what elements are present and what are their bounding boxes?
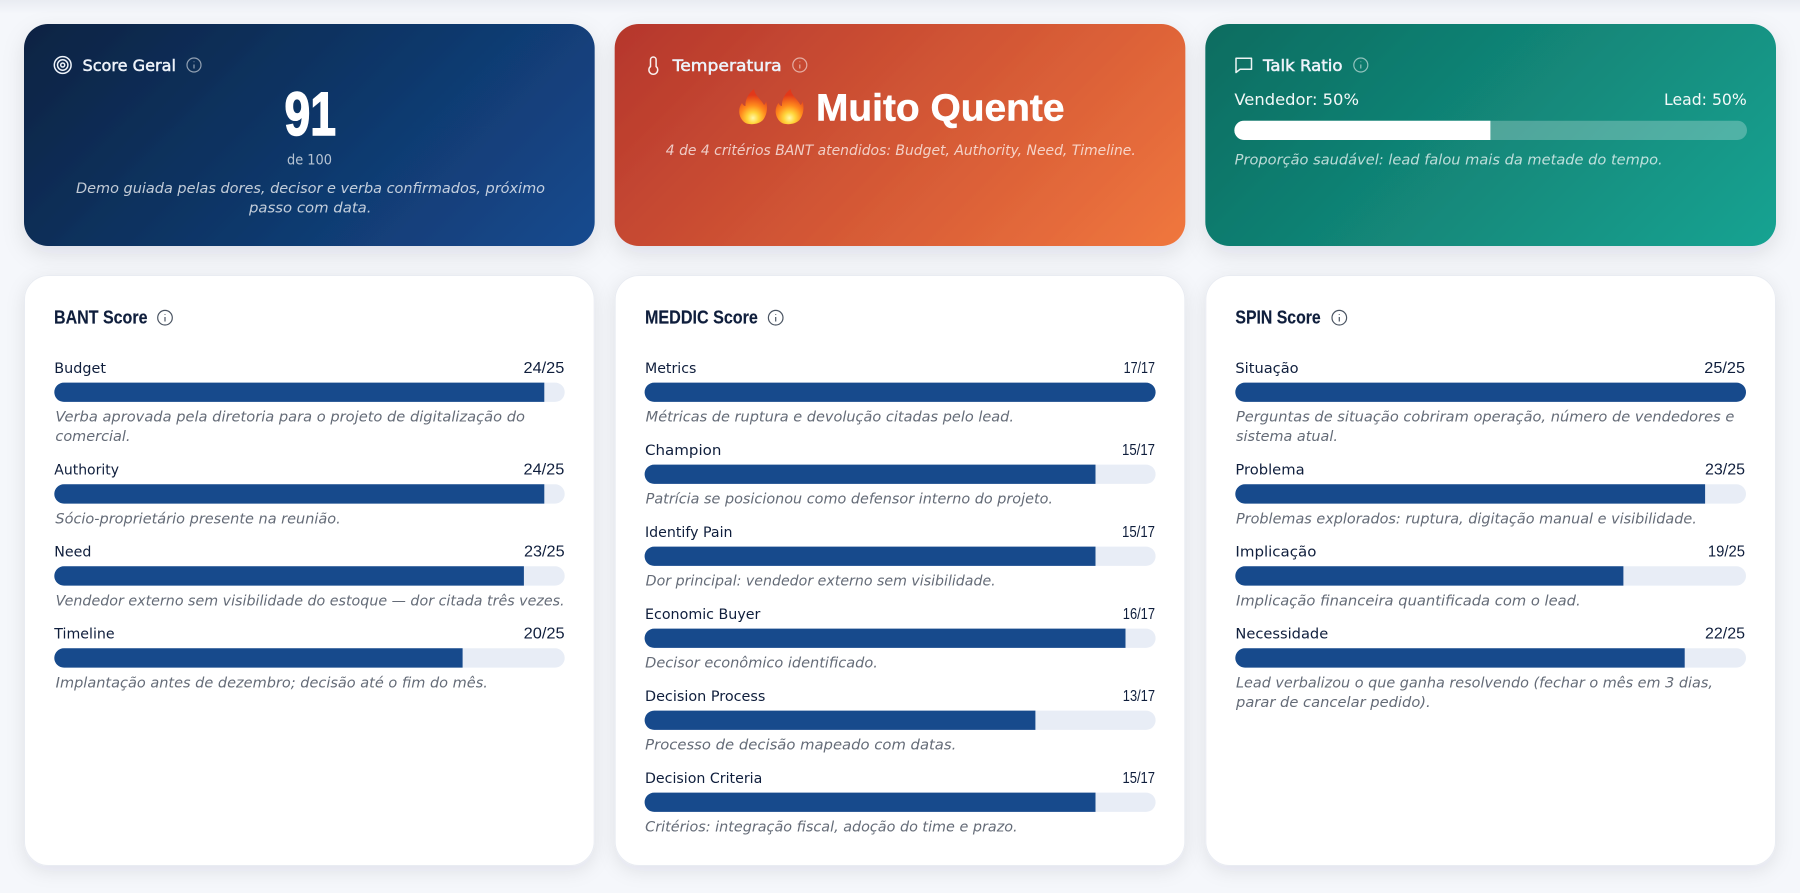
lead share: Lead: 50% xyxy=(1664,90,1747,109)
row: necessidade: Lead verbalizou o que ganha resolvendo (fechar o mês em 3 dias, xyxy=(1236,675,1713,691)
row: authority: Authority xyxy=(54,463,119,479)
panel: temperatura xyxy=(615,24,1185,246)
talk ratio bar xyxy=(1234,121,1747,140)
icon: chat bubble xyxy=(1236,58,1252,72)
score description xyxy=(76,181,545,216)
row: budget xyxy=(54,360,565,445)
row: budget: Verba aprovada pela diretoria para o projeto de digitalização do xyxy=(55,410,525,426)
row: need: Vendedor externo sem visibilidade do estoque — dor citada três vezes. xyxy=(56,593,565,609)
seller share: Vendedor: 50% xyxy=(1234,90,1359,109)
row: authority: Sócio-proprietário presente na reunião. xyxy=(55,511,341,527)
row: implicação: 19/25 xyxy=(1708,544,1745,561)
row: implicação: Implicação xyxy=(1235,545,1317,561)
row: necessidade: 22/25 xyxy=(1705,626,1745,643)
row: identify pain: Dor principal: vendedor externo sem visibilidade. xyxy=(646,574,996,590)
row: champion: Patrícia se posicionou como defensor interno do projeto. xyxy=(646,492,1053,508)
row: authority xyxy=(54,462,565,527)
panel: talk ratio xyxy=(1205,24,1776,246)
row: economic buyer: Decisor econômico identificado. xyxy=(645,656,878,672)
temperature value: Muito Quente xyxy=(816,88,1064,130)
row: implicação: Implicação financeira quantificada com o lead. xyxy=(1236,593,1581,609)
icon: target xyxy=(54,57,71,73)
panel: SPIN score xyxy=(1206,276,1776,866)
row: champion: Champion xyxy=(645,443,721,459)
row: budget: Budget xyxy=(54,361,106,377)
row: situação: 25/25 xyxy=(1704,360,1745,377)
icon: info xyxy=(1332,310,1347,325)
row: decision process xyxy=(645,688,1156,754)
icon: info xyxy=(768,310,783,325)
temperature description: 4 de 4 critérios BANT atendidos: Budget, Authority, Need, Timeline. xyxy=(666,143,1136,159)
row: metrics xyxy=(645,360,1156,426)
row: necessidade: Necessidade xyxy=(1235,627,1328,643)
row: need: Need xyxy=(54,545,91,561)
row: problema: 23/25 xyxy=(1705,462,1745,479)
heading: SPIN score: SPIN Score xyxy=(1235,308,1321,328)
row: necessidade: parar de cancelar pedido). xyxy=(1235,695,1431,711)
score scale: de 100 xyxy=(287,152,332,168)
row: timeline: 20/25 xyxy=(524,626,565,643)
row: identify pain: Identify Pain xyxy=(645,525,732,541)
row: decision criteria: Critérios: integração fiscal, adoção do time e prazo. xyxy=(645,820,1018,836)
row: metrics: Métricas de ruptura e devolução citadas pelo lead. xyxy=(646,410,1014,426)
icon: info xyxy=(793,58,807,72)
panel: BANT score xyxy=(24,276,594,866)
icon: info xyxy=(158,310,172,325)
icon: flame xyxy=(776,89,804,124)
talk ratio description: Proporção saudável: lead falou mais da metade do tempo. xyxy=(1235,152,1663,168)
heading: BANT score: BANT Score xyxy=(54,308,148,328)
row: need xyxy=(54,544,565,609)
row: decision criteria xyxy=(645,770,1156,836)
row: situação xyxy=(1235,360,1746,445)
row: economic buyer xyxy=(645,606,1156,672)
row: problema: Problemas explorados: ruptura, digitação manual e visibilidade. xyxy=(1236,511,1697,527)
heading: temperatura: Temperatura xyxy=(672,56,782,75)
row: authority: 24/25 xyxy=(524,462,564,479)
row: identify pain xyxy=(645,524,1156,590)
row: budget: comercial. xyxy=(55,429,130,445)
icon: info xyxy=(1354,58,1368,72)
row: decision criteria: 15/17 xyxy=(1122,770,1155,787)
row: decision process: 13/17 xyxy=(1123,688,1155,705)
row: problema xyxy=(1235,462,1746,527)
row: budget: 24/25 xyxy=(524,360,564,377)
panel: MEDDIC score xyxy=(615,276,1185,866)
heading: MEDDIC score: MEDDIC Score xyxy=(645,308,758,328)
score description: passo com data. xyxy=(248,200,372,216)
row: necessidade xyxy=(1235,626,1746,711)
row: timeline xyxy=(53,626,565,691)
row: metrics: 17/17 xyxy=(1124,360,1155,377)
panel: score geral xyxy=(24,24,595,246)
row: economic buyer: Economic Buyer xyxy=(645,607,760,623)
row: situação: Perguntas de situação cobriram operação, número de vendedores e xyxy=(1236,410,1734,426)
row: problema: Problema xyxy=(1235,463,1305,479)
row: decision process: Decision Process xyxy=(645,689,765,705)
row: champion: 15/17 xyxy=(1122,442,1155,459)
row: timeline: Timeline xyxy=(53,627,115,643)
icon: flame xyxy=(739,89,767,124)
row: decision process: Processo de decisão mapeado com datas. xyxy=(645,738,956,754)
row: timeline: Implantação antes de dezembro; decisão até o fim do mês. xyxy=(56,675,488,691)
row: identify pain: 15/17 xyxy=(1122,524,1155,541)
score value: 91 xyxy=(284,80,336,148)
heading: score geral: Score Geral xyxy=(82,56,176,75)
row: situação: sistema atual. xyxy=(1236,429,1338,445)
icon: info xyxy=(187,58,201,72)
row: need: 23/25 xyxy=(524,544,565,561)
row: economic buyer: 16/17 xyxy=(1123,606,1155,623)
icon: thermometer xyxy=(649,57,658,74)
row: metrics: Metrics xyxy=(645,361,696,377)
row: decision criteria: Decision Criteria xyxy=(645,771,762,787)
row: champion xyxy=(645,442,1156,508)
row: implicação xyxy=(1235,544,1746,609)
heading: talk ratio: Talk Ratio xyxy=(1262,56,1342,75)
row: situação: Situação xyxy=(1235,361,1299,377)
score description: Demo guiada pelas dores, decisor e verba confirmados, próximo xyxy=(76,181,545,197)
